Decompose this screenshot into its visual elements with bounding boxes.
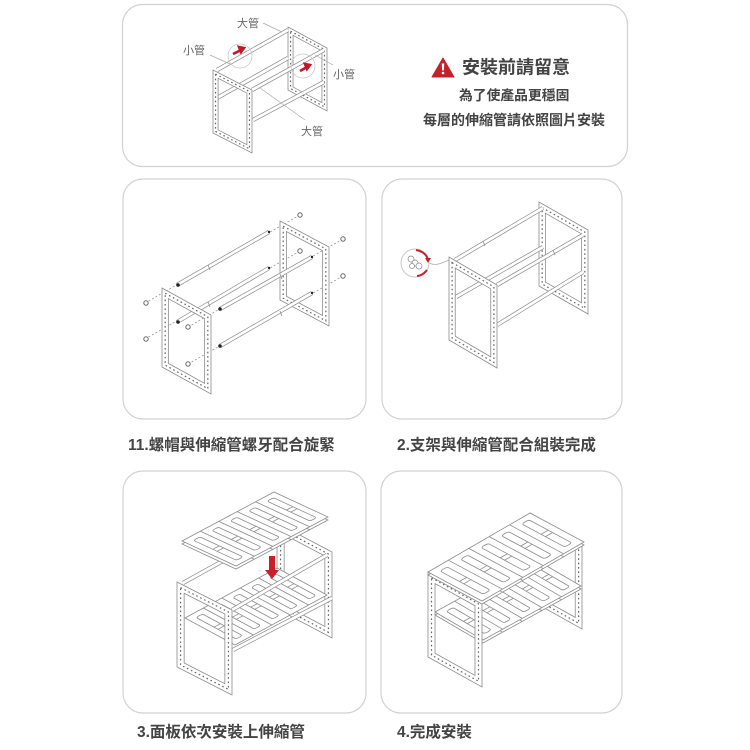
label: large tube bottom: 大管: [301, 124, 323, 138]
top shelf thickness: [428, 516, 584, 604]
panel: step 2: [382, 179, 622, 419]
panel frame: [381, 471, 622, 713]
diagram: assembled frame: [401, 202, 588, 368]
magnifier circles: [228, 44, 315, 78]
diagram: finished rack: [428, 513, 584, 687]
lower shelf: [435, 558, 581, 640]
heading: notice: 安裝前請留意: [462, 56, 570, 78]
panel: notice: [122, 4, 628, 166]
diagram: shelf placement: [177, 492, 332, 695]
diagram: tube sizes: [213, 27, 327, 153]
front frame: [449, 257, 497, 368]
front frame: [177, 582, 232, 695]
panel frame: [382, 179, 622, 419]
dashed guides: [145, 215, 343, 364]
back frame: [288, 27, 327, 111]
label: small tube left: 小管: [183, 43, 205, 57]
back frame: [530, 513, 582, 629]
arrow head: [425, 258, 431, 263]
tubes: [455, 208, 583, 325]
icon: warning triangle: [432, 58, 454, 77]
leader lines: [210, 23, 333, 120]
front frame: [213, 70, 252, 153]
panel frame: [122, 4, 628, 166]
panel: step 1: [123, 179, 366, 419]
label: small tube right: 小管: [333, 67, 355, 81]
label: large tube top: 大管: [237, 16, 259, 30]
panel: step 4: [381, 471, 622, 713]
icon: rotate arrows: [416, 250, 428, 276]
diagram: exploded frame: [144, 213, 345, 394]
lower tube front: [233, 598, 332, 650]
lower shelf thickness: [435, 561, 581, 643]
top shelf: [428, 513, 584, 601]
caption: step 1: 11.螺帽與伸縮管螺牙配合旋緊: [128, 435, 335, 454]
tube end nuts: [176, 231, 313, 348]
icon: red arrows: [233, 47, 310, 71]
back frame: [539, 202, 588, 314]
caption: step 2: 2.支架與伸縮管配合組裝完成: [397, 435, 596, 454]
caption: step 4: 4.完成安裝: [397, 722, 472, 741]
front frame: [162, 288, 211, 394]
tubes: [177, 232, 312, 346]
back frame: [280, 221, 329, 326]
top shelf thickness: [182, 495, 328, 569]
front frame: [428, 572, 482, 687]
top shelf: [182, 492, 328, 566]
text: notice line 2: 每層的伸縮管請依照圖片安裝: [423, 112, 605, 128]
upper tube front: [232, 555, 327, 610]
tubes: [217, 30, 324, 120]
panel frame: [123, 179, 366, 419]
callout: nut detail: [401, 249, 449, 277]
arrow: down: [265, 556, 279, 579]
screws: [144, 213, 345, 366]
caption: step 3: 3.面板依次安裝上伸縮管: [137, 722, 305, 741]
icon: nut: [408, 256, 422, 269]
lower shelf: [185, 568, 327, 645]
back frame: [277, 523, 332, 638]
panel: step 3: [123, 471, 366, 713]
panel frame: [123, 471, 366, 713]
text: notice line 1: 為了使產品更穩固: [459, 87, 569, 103]
upper tubes back: [183, 531, 277, 583]
